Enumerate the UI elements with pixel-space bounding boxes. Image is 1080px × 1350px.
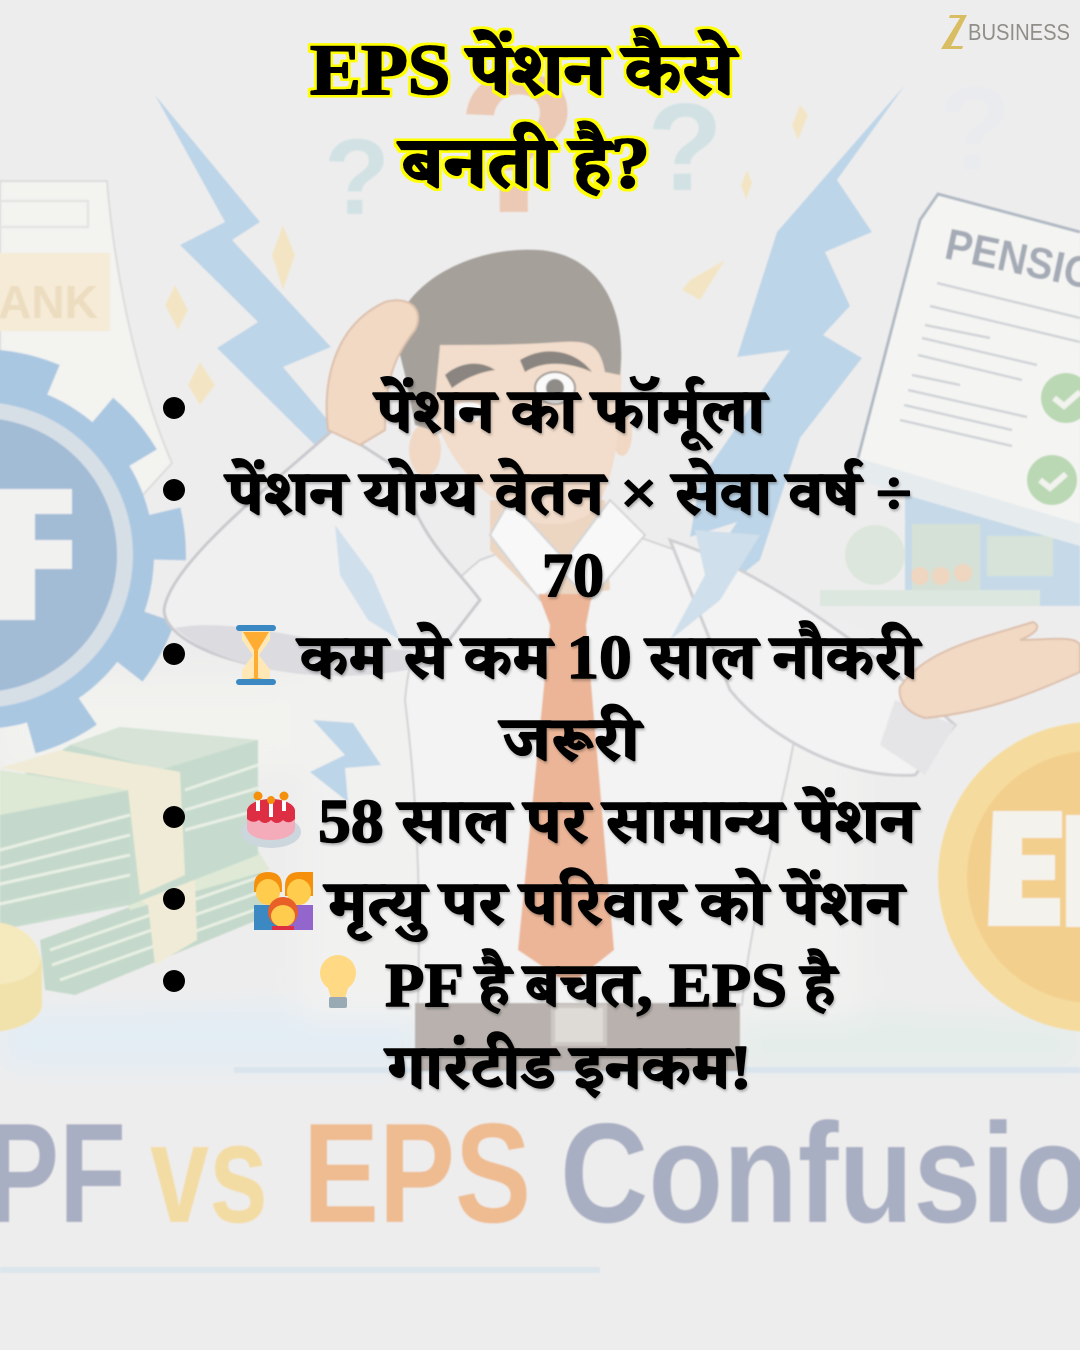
floor lines <box>234 1067 1080 1073</box>
belt buckle <box>553 1006 605 1044</box>
question marks <box>324 32 1012 255</box>
bullet 6: PF vs EPS takeaway <box>163 948 839 1102</box>
bolt seen across sleeves <box>335 525 400 640</box>
face <box>420 335 621 524</box>
lower stack <box>40 860 270 995</box>
letter F <box>0 489 72 620</box>
neck <box>490 500 610 600</box>
icon: hourglass <box>236 625 276 685</box>
trousers <box>415 1003 740 1071</box>
outstretched right arm <box>670 540 955 775</box>
brows and eye <box>520 351 592 372</box>
upper stack <box>0 727 258 930</box>
icon: light bulb <box>320 955 356 1008</box>
bullet 6: PF vs EPS takeaway: गारंटीड इनकम! <box>384 1032 752 1102</box>
tie <box>518 594 614 985</box>
letter E <box>988 811 1062 926</box>
town behind pension document <box>820 490 1080 606</box>
icon: family <box>254 872 313 930</box>
bullet 2: formula: पेंशन योग्य वेतन × सेवा वर्ष ÷ <box>224 458 912 528</box>
shirt cuff <box>880 700 955 775</box>
floor wash <box>0 640 1080 1070</box>
sparks <box>165 105 808 405</box>
EPS coin <box>938 722 1080 1032</box>
man: confused character <box>164 250 1080 1071</box>
title <box>310 28 739 203</box>
bank document <box>0 181 172 520</box>
bullet list <box>163 376 923 1102</box>
money stacks <box>0 727 270 1032</box>
open hand <box>900 622 1080 718</box>
raised left arm <box>164 428 480 673</box>
bullet 6: PF vs EPS takeaway: PF है बचत, EPS है <box>385 948 839 1020</box>
coins <box>0 925 42 1032</box>
bullet 5: family pension: मृत्यु पर परिवार को पेंशन <box>323 868 906 942</box>
large caption: EPS <box>303 1094 531 1253</box>
torso <box>405 520 800 1005</box>
bullet 3: minimum service: कम से कम 10 साल नौकरी <box>296 620 923 692</box>
collar <box>490 500 645 600</box>
question marks: ? <box>938 62 1012 196</box>
bullet 4: age 58: 58 साल पर सामान्य पेंशन <box>318 786 920 856</box>
PF gear <box>0 367 168 743</box>
large caption: vs <box>150 1094 268 1253</box>
bullet 3: minimum service <box>163 620 923 774</box>
bank document: ANK <box>0 276 98 328</box>
question marks: ? <box>324 116 390 237</box>
raised hand <box>327 300 418 445</box>
lightning bolts <box>155 85 905 802</box>
question marks: ? <box>457 32 579 255</box>
title: बनती है? <box>397 121 650 203</box>
bullet 1: formula heading: पेंशन का फॉर्मूला <box>373 376 770 450</box>
logo: Z Business <box>941 15 1070 49</box>
bullet 5: family pension <box>163 868 906 942</box>
question marks: ? <box>647 79 723 217</box>
hair <box>395 250 621 430</box>
icon: cake <box>241 792 301 848</box>
title: EPS पेंशन कैसे <box>310 28 739 110</box>
bullet 1: formula heading <box>163 376 770 450</box>
large caption <box>0 1094 1080 1253</box>
bullet 2: formula <box>163 458 912 610</box>
pension document <box>855 194 1080 546</box>
ears <box>409 424 441 476</box>
bullet 3: minimum service: जरूरी <box>498 704 644 774</box>
bullet 2: formula: 70 <box>542 542 604 610</box>
